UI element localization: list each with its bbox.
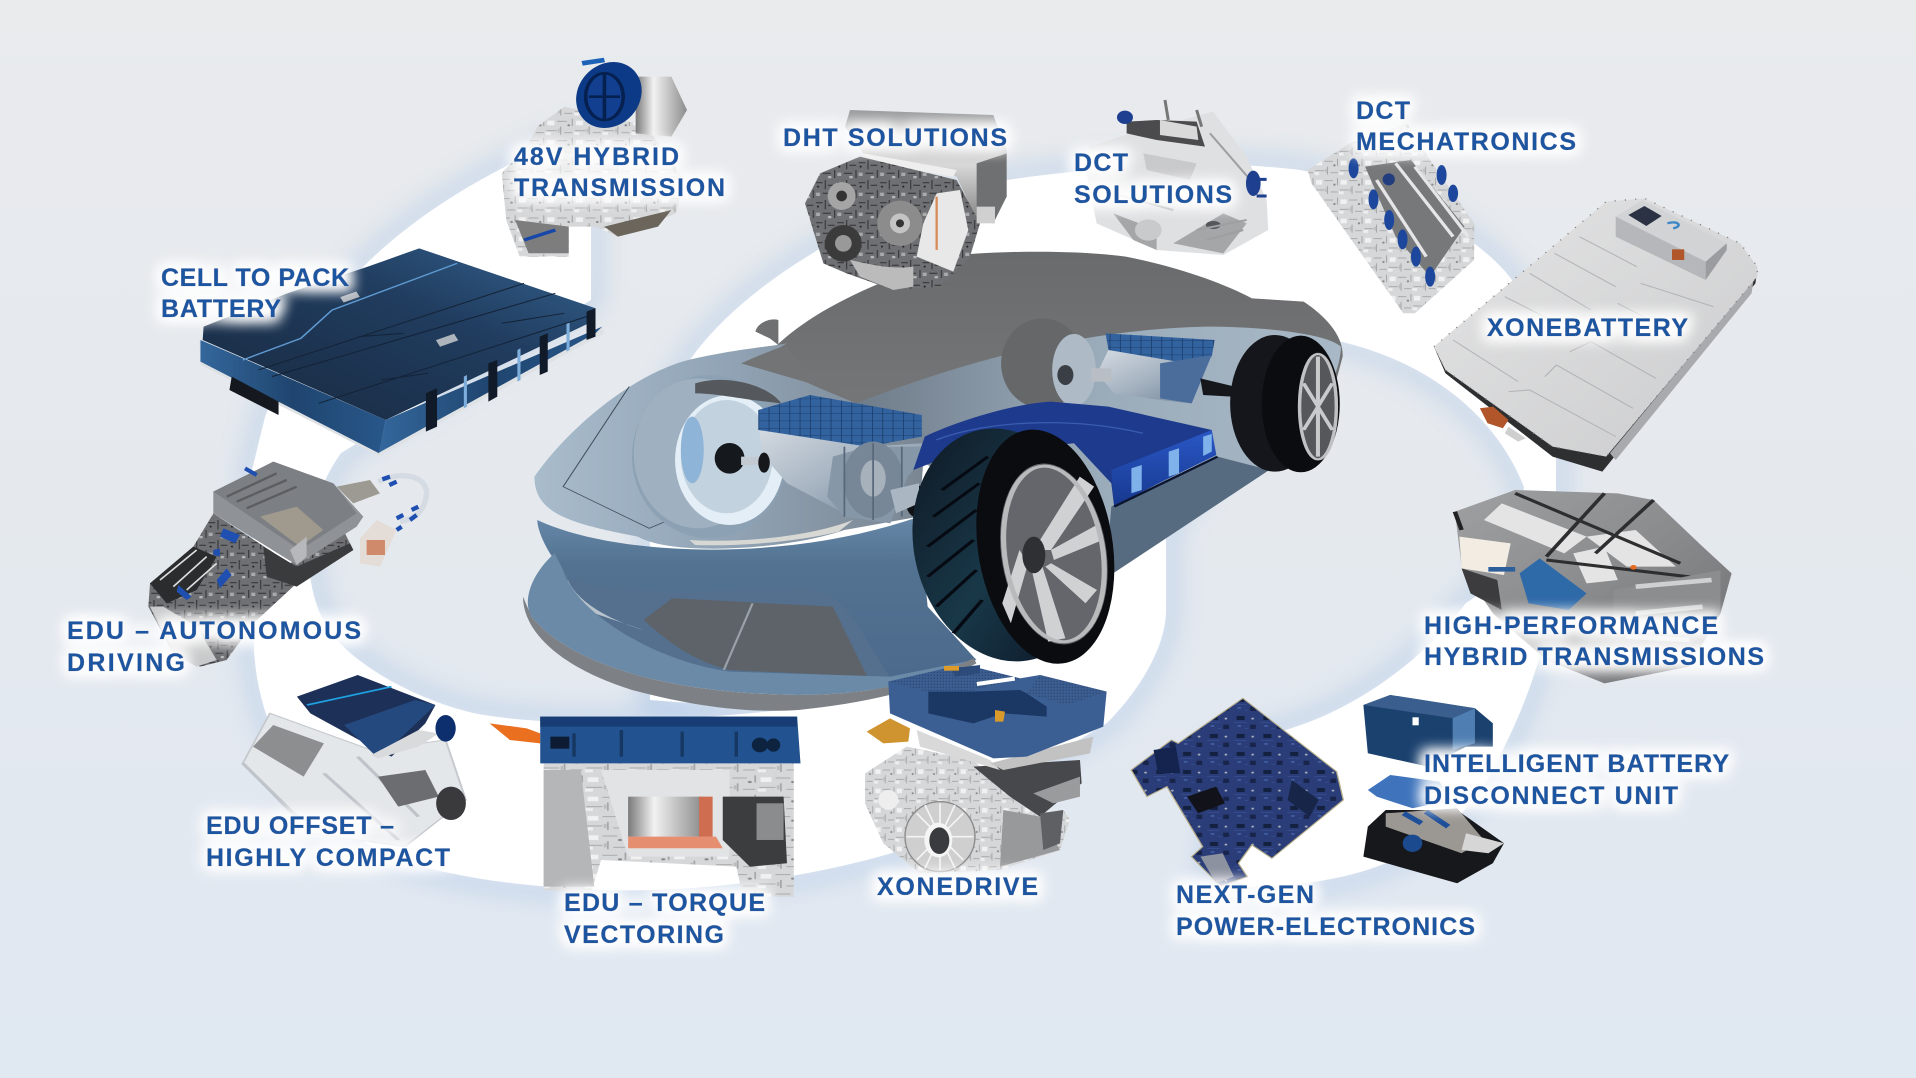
label: intelligent battery disconnect unit: INTELLIGENT BATTERY <box>1424 750 1729 778</box>
rear body side <box>856 327 1341 578</box>
hood outline <box>563 387 701 528</box>
label: DCT solutions: SOLUTIONS <box>1074 181 1232 209</box>
icon: DCT mechatronics <box>1308 123 1474 313</box>
front drive unit <box>741 395 929 523</box>
lower sill <box>1106 457 1269 578</box>
label: EDU autonomous driving <box>67 617 361 677</box>
hood <box>534 343 925 549</box>
cover <box>1363 695 1493 767</box>
label: cell to pack battery: CELL TO PACK <box>161 264 349 292</box>
label: EDU torque vectoring <box>564 889 765 949</box>
icon: EDU autonomous driving <box>148 462 427 667</box>
icon: DCT solutions <box>1087 100 1268 255</box>
car roof and rear <box>747 252 1343 578</box>
near front wheel <box>899 425 1127 666</box>
label: 48V hybrid transmission: TRANSMISSION <box>514 174 725 202</box>
label: EDU autonomous driving: DRIVING <box>67 649 185 677</box>
label: next-gen power-electronics: NEXT-GEN <box>1176 881 1314 909</box>
label: EDU offset highly compact <box>206 812 450 872</box>
label: high-performance hybrid transmissions <box>1424 612 1764 671</box>
side mirror <box>755 319 778 345</box>
icon: EDU torque vectoring <box>490 717 800 897</box>
icon: high-performance hybrid transmission <box>1455 490 1732 683</box>
label: DCT mechatronics: MECHATRONICS <box>1356 128 1576 156</box>
label: next-gen power-electronics: POWER-ELECTRONICS <box>1176 913 1475 941</box>
icon: next-gen power electronics board <box>1131 698 1343 887</box>
far front wheel and brake disc <box>632 375 853 545</box>
label: EDU offset highly compact: EDU OFFSET – <box>206 812 394 840</box>
label: next-gen power-electronics <box>1176 881 1475 941</box>
label: DCT solutions <box>1074 149 1232 209</box>
label: DHT solutions: DHT SOLUTIONS <box>783 124 1007 152</box>
label: intelligent battery disconnect unit: DISCONNECT UNIT <box>1424 782 1678 810</box>
front lower body <box>537 517 976 678</box>
contactor base <box>1363 810 1504 883</box>
windshield base <box>741 345 856 403</box>
icon: cell to pack battery <box>199 248 604 456</box>
front grille <box>563 570 890 678</box>
icon: intelligent battery disconnect unit <box>1363 695 1504 883</box>
blue glow under white ring <box>252 130 1556 890</box>
circuit plate <box>1368 775 1453 808</box>
label: cell to pack battery <box>161 264 349 323</box>
label: high-performance hybrid transmissions: HIGH-PERFORMANCE <box>1424 612 1718 640</box>
label: XONEBATTERY: XONEBATTERY <box>1487 314 1688 342</box>
label: EDU torque vectoring: EDU – TORQUE <box>564 889 765 917</box>
icon: EDU offset <box>243 675 466 847</box>
near rear wheel <box>1230 335 1340 472</box>
label: XONEDRIVE: XONEDRIVE <box>877 873 1038 901</box>
icon: XONEBATTERY pack <box>1434 198 1757 472</box>
label: cell to pack battery: BATTERY <box>161 295 281 323</box>
label: EDU torque vectoring: VECTORING <box>564 921 724 949</box>
label: 48V hybrid transmission: 48V HYBRID <box>514 143 679 171</box>
icon: XONEDRIVE unit <box>865 665 1107 873</box>
label: EDU autonomous driving: EDU – AUTONOMOUS <box>67 617 361 645</box>
rear drive unit <box>1091 333 1235 403</box>
central car with transparent body <box>523 252 1343 711</box>
icon: DHT solutions <box>805 110 1007 290</box>
icon: 48V hybrid transmission <box>502 57 687 257</box>
front splitter <box>523 553 976 711</box>
label: 48V hybrid transmission <box>514 143 725 202</box>
label: DCT mechatronics: DCT <box>1356 97 1410 125</box>
label: high-performance hybrid transmissions: HYBRID TRANSMISSIONS <box>1424 643 1764 671</box>
label: DCT solutions: DCT <box>1074 149 1128 177</box>
far rear wheel <box>1001 318 1096 408</box>
label: DCT mechatronics <box>1356 97 1576 156</box>
white ring band <box>252 130 1556 890</box>
label: EDU offset highly compact: HIGHLY COMPACT <box>206 844 450 872</box>
traction battery <box>913 402 1218 507</box>
label: intelligent battery disconnect unit <box>1424 750 1729 810</box>
